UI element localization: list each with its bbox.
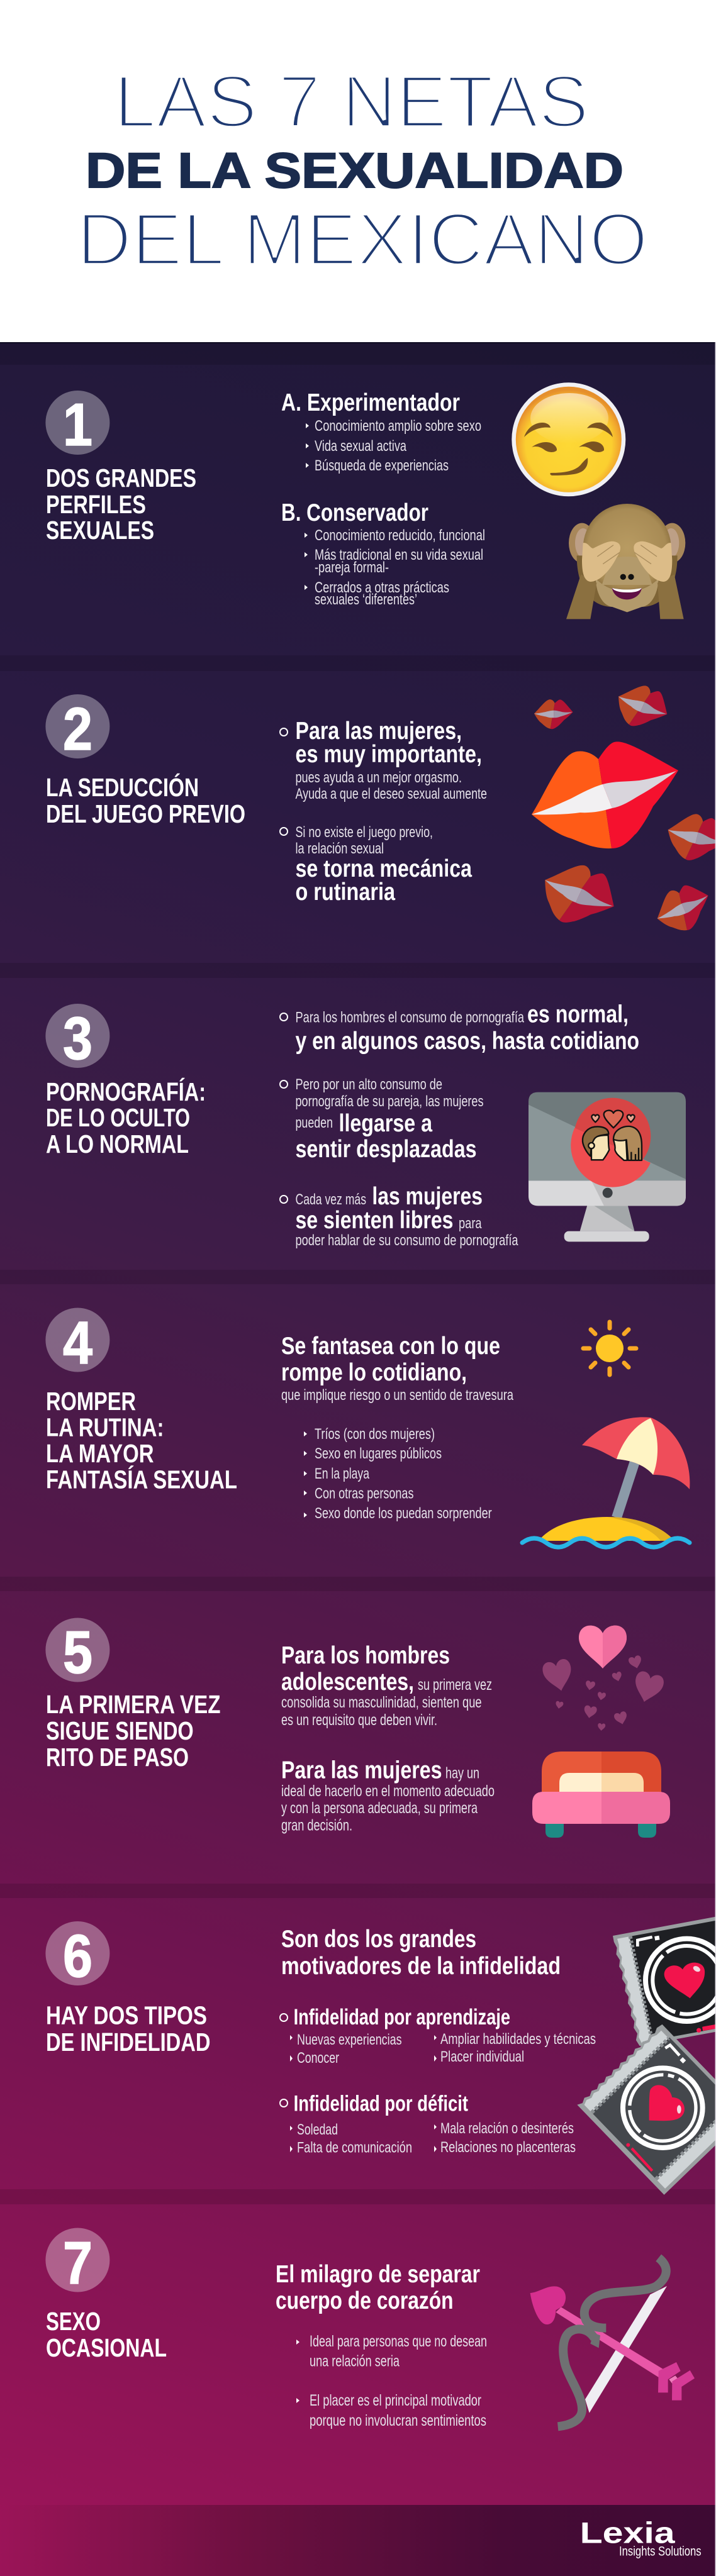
profile B: -pareja formal- bbox=[315, 559, 389, 576]
text: el milagro: El milagro de separar bbox=[276, 2261, 480, 2288]
text: infidelidad por aprendizaje: Conocer bbox=[297, 2050, 339, 2067]
profile A: Vida sexual activa bbox=[315, 438, 406, 455]
profile B: Más tradicional en su vida sexual bbox=[315, 547, 483, 564]
number badge 1: 1 bbox=[63, 391, 92, 458]
heading 4: FANTASÍA SEXUAL bbox=[46, 1465, 237, 1494]
text: el milagro: cuerpo de corazón bbox=[276, 2287, 454, 2314]
heading 4: LA RUTINA: bbox=[46, 1413, 164, 1442]
text: infidelidad por aprendizaje: Infidelidad por aprendizaje bbox=[294, 2005, 510, 2029]
icon: cupid bow and arrow bbox=[530, 2258, 695, 2426]
profile B bbox=[281, 499, 485, 608]
text: desplazadas: pueden bbox=[296, 1114, 333, 1131]
heading 1 bbox=[46, 464, 196, 545]
text: desplazadas: sentir desplazadas bbox=[296, 1136, 477, 1163]
text: infidelidad por deficit: Soledad bbox=[297, 2121, 338, 2138]
panel: 6 infidelidad bbox=[0, 1898, 716, 2195]
text: se fantasea: rompe lo cotidiano, bbox=[281, 1359, 467, 1386]
number badge 3: 3 bbox=[63, 1005, 92, 1072]
white title background bbox=[0, 0, 716, 343]
profile A: Búsqueda de experiencias bbox=[315, 457, 449, 474]
number badge 1 bbox=[45, 391, 109, 458]
text: si no existe: Si no existe el juego previo, bbox=[296, 824, 433, 841]
text: para las mujeres: hay un bbox=[445, 1765, 479, 1782]
number badge 5 bbox=[45, 1618, 109, 1686]
number badge 2 bbox=[45, 694, 109, 763]
panel: 4 romper la rutina bbox=[0, 1284, 715, 1577]
text: infidelidad por aprendizaje: Nuevas experiencias bbox=[297, 2031, 402, 2048]
text: para los hombres: y en algunos casos, hasta cotidiano bbox=[296, 1028, 639, 1055]
text: motivadores bbox=[281, 1926, 561, 1980]
number badge 3 bbox=[45, 1004, 109, 1072]
text: para las mujeres: gran decisión. bbox=[281, 1816, 352, 1834]
list: sexo ocasional: porque no involucran sentimientos bbox=[310, 2412, 486, 2429]
icon: lips bbox=[531, 674, 716, 941]
text: infidelidad por aprendizaje: Ampliar habilidades y técnicas bbox=[440, 2031, 596, 2048]
number badge 4 bbox=[45, 1308, 109, 1377]
text: para los hombres: es normal, bbox=[527, 1001, 629, 1028]
icon: computer monitor with couple bbox=[529, 1092, 686, 1241]
text: para los hombres adolescentes: consolida su masculinidad, sienten que bbox=[281, 1694, 482, 1711]
text: para las mujeres: Para las mujeres bbox=[281, 1757, 442, 1784]
condom pack dark bbox=[613, 1904, 716, 2047]
text: motivadores: motivadores de la infidelidad bbox=[281, 1953, 561, 1980]
list: fantasias: Tríos (con dos mujeres) bbox=[315, 1426, 435, 1443]
text: el milagro bbox=[276, 2261, 480, 2314]
panel: 1 dos grandes perfiles sexuales bbox=[0, 365, 715, 655]
icon: see-no-evil monkey bbox=[566, 504, 685, 619]
panel: 3 pornografia bbox=[0, 978, 715, 1270]
logo: Lexia bbox=[580, 2516, 702, 2559]
text: se fantasea bbox=[281, 1333, 513, 1404]
panel: 2 la seduccion del juego previo bbox=[0, 671, 716, 963]
text: desplazadas: pornografía de su pareja, las mujeres bbox=[296, 1093, 483, 1110]
logo: Lexia: Lexia bbox=[580, 2516, 676, 2549]
title: DEL MEXICANO bbox=[77, 198, 648, 281]
heading 6: DE INFIDELIDAD bbox=[46, 2028, 210, 2057]
list: fantasias: Con otras personas bbox=[315, 1485, 414, 1502]
condom pack grey bbox=[577, 2023, 716, 2195]
list: sexo ocasional: una relación seria bbox=[310, 2352, 400, 2370]
text: para los hombres adolescentes: Para los hombres bbox=[281, 1642, 450, 1669]
heading 4: ROMPER bbox=[46, 1387, 136, 1416]
text: para los hombres adolescentes: adolescentes, bbox=[281, 1668, 414, 1696]
heading 3 bbox=[46, 1077, 206, 1158]
text: si no existe: o rutinaria bbox=[296, 879, 395, 906]
text: para las mujeres bbox=[281, 1757, 495, 1834]
footer band bbox=[0, 2505, 716, 2576]
text: desplazadas: llegarse a bbox=[338, 1110, 432, 1137]
heading 1: DOS GRANDES bbox=[46, 464, 196, 492]
icon: hearts bbox=[541, 1626, 666, 1731]
number badge 6 bbox=[45, 1921, 109, 1990]
text: para las mujeres: y con la persona adecuada, su primera bbox=[281, 1799, 478, 1817]
text: para las mujeres: es muy importante, bbox=[296, 741, 482, 768]
text: infidelidad por deficit: Falta de comunicación bbox=[297, 2140, 412, 2156]
text: para las mujeres: ideal de hacerlo en el momento adecuado bbox=[281, 1782, 495, 1800]
icon: smirking face bbox=[512, 382, 625, 496]
heading 5 bbox=[46, 1690, 220, 1772]
icon: condom packs bbox=[577, 1904, 716, 2195]
profile B: B. Conservador bbox=[281, 499, 428, 526]
profile A: A. Experimentador bbox=[281, 389, 460, 416]
heading 7: OCASIONAL bbox=[46, 2333, 167, 2362]
heading 5: LA PRIMERA VEZ bbox=[46, 1690, 220, 1719]
text: desplazadas bbox=[280, 1076, 483, 1163]
text: libres: poder hablar de su consumo de pornografía bbox=[296, 1232, 518, 1249]
text: para los hombres adolescentes: su primera vez bbox=[418, 1676, 492, 1694]
profile A bbox=[281, 389, 481, 474]
text: libres: se sienten libres bbox=[296, 1207, 453, 1234]
text: infidelidad por deficit bbox=[280, 2092, 576, 2156]
heading 6: HAY DOS TIPOS bbox=[46, 2001, 207, 2030]
text: si no existe: se torna mecánica bbox=[296, 855, 472, 882]
text: libres bbox=[280, 1183, 518, 1249]
text: infidelidad por deficit: Mala relación o desinterés bbox=[440, 2120, 574, 2137]
list: sexo ocasional bbox=[296, 2333, 487, 2429]
text: libres: Cada vez más bbox=[296, 1191, 366, 1208]
profile B: Conocimiento reducido, funcional bbox=[315, 527, 485, 544]
text: motivadores: Son dos los grandes bbox=[281, 1926, 476, 1953]
text: si no existe: la relación sexual bbox=[296, 840, 384, 857]
heading 4 bbox=[46, 1387, 237, 1494]
profile B: sexuales ‘diferentes’ bbox=[315, 591, 417, 608]
heading 3: PORNOGRAFÍA: bbox=[46, 1077, 206, 1106]
number badge 5: 5 bbox=[63, 1619, 92, 1686]
text: para los hombres bbox=[280, 1001, 639, 1055]
list: sexo ocasional: Ideal para personas que no desean bbox=[310, 2333, 487, 2350]
text: se fantasea: Se fantasea con lo que bbox=[281, 1333, 500, 1360]
heading 7 bbox=[46, 2307, 167, 2362]
title bbox=[77, 60, 648, 281]
list: fantasias: Sexo donde los puedan sorprender bbox=[315, 1505, 492, 1522]
heading 1: SEXUALES bbox=[46, 516, 154, 545]
number badge 6: 6 bbox=[63, 1923, 92, 1990]
heading 2: LA SEDUCCIÓN bbox=[46, 773, 199, 802]
text: se fantasea: que implique riesgo o un sentido de travesura bbox=[281, 1387, 513, 1404]
text: libres: las mujeres bbox=[372, 1183, 483, 1210]
number badge 7 bbox=[45, 2228, 109, 2297]
list: fantasias bbox=[304, 1426, 492, 1522]
text: infidelidad por aprendizaje: Placer individual bbox=[440, 2048, 524, 2065]
text: libres: para bbox=[459, 1215, 482, 1232]
text: para las mujeres: Para las mujeres, bbox=[296, 718, 462, 745]
profile B: Cerrados a otras prácticas bbox=[315, 579, 449, 596]
heading 4: LA MAYOR bbox=[46, 1439, 154, 1468]
list: fantasias: Sexo en lugares públicos bbox=[315, 1445, 442, 1462]
text: desplazadas: Pero por un alto consumo de bbox=[296, 1076, 442, 1093]
heading 6 bbox=[46, 2001, 210, 2057]
icon: bed bbox=[532, 1752, 670, 1838]
heading 3: A LO NORMAL bbox=[46, 1130, 189, 1158]
text: infidelidad por deficit: Relaciones no placenteras bbox=[440, 2139, 576, 2156]
heading 1: PERFILES bbox=[46, 490, 146, 519]
text: para los hombres: Para los hombres el consumo de pornografía bbox=[296, 1009, 524, 1026]
title: DE LA SEXUALIDAD bbox=[86, 142, 624, 198]
title: LAS 7 NETAS bbox=[114, 60, 589, 143]
text: para los hombres adolescentes bbox=[281, 1642, 492, 1729]
heading 7: SEXO bbox=[46, 2307, 101, 2336]
list: sexo ocasional: El placer es el principal motivador bbox=[310, 2392, 481, 2409]
text: infidelidad por aprendizaje bbox=[280, 2005, 596, 2067]
heading 2 bbox=[46, 773, 245, 828]
list: fantasias: En la playa bbox=[315, 1465, 369, 1482]
number badge 7: 7 bbox=[63, 2229, 92, 2297]
icon: beach umbrella on island bbox=[522, 1417, 690, 1547]
text: si no existe bbox=[280, 824, 472, 906]
number badge 4: 4 bbox=[63, 1309, 92, 1377]
text: para las mujeres: pues ayuda a un mejor orgasmo. bbox=[296, 769, 462, 786]
text: para las mujeres: Ayuda a que el deseo sexual aumente bbox=[296, 786, 487, 802]
heading 3: DE LO OCULTO bbox=[46, 1103, 190, 1132]
text: infidelidad por deficit: Infidelidad por déficit bbox=[294, 2092, 468, 2116]
text: para las mujeres bbox=[280, 718, 487, 802]
panel: 7 sexo ocasional bbox=[0, 2204, 715, 2505]
icon: sun bbox=[583, 1322, 636, 1375]
couple icon bbox=[571, 1098, 651, 1187]
heading 2: DEL JUEGO PREVIO bbox=[46, 799, 245, 828]
panel: 5 la primera vez bbox=[0, 1591, 715, 1884]
text: para los hombres adolescentes: es un requisito que deben vivir. bbox=[281, 1711, 437, 1729]
heading 5: RITO DE PASO bbox=[46, 1743, 189, 1772]
profile A: Conocimiento amplio sobre sexo bbox=[315, 418, 481, 435]
heading 5: SIGUE SIENDO bbox=[46, 1716, 194, 1745]
number badge 2: 2 bbox=[63, 696, 92, 763]
